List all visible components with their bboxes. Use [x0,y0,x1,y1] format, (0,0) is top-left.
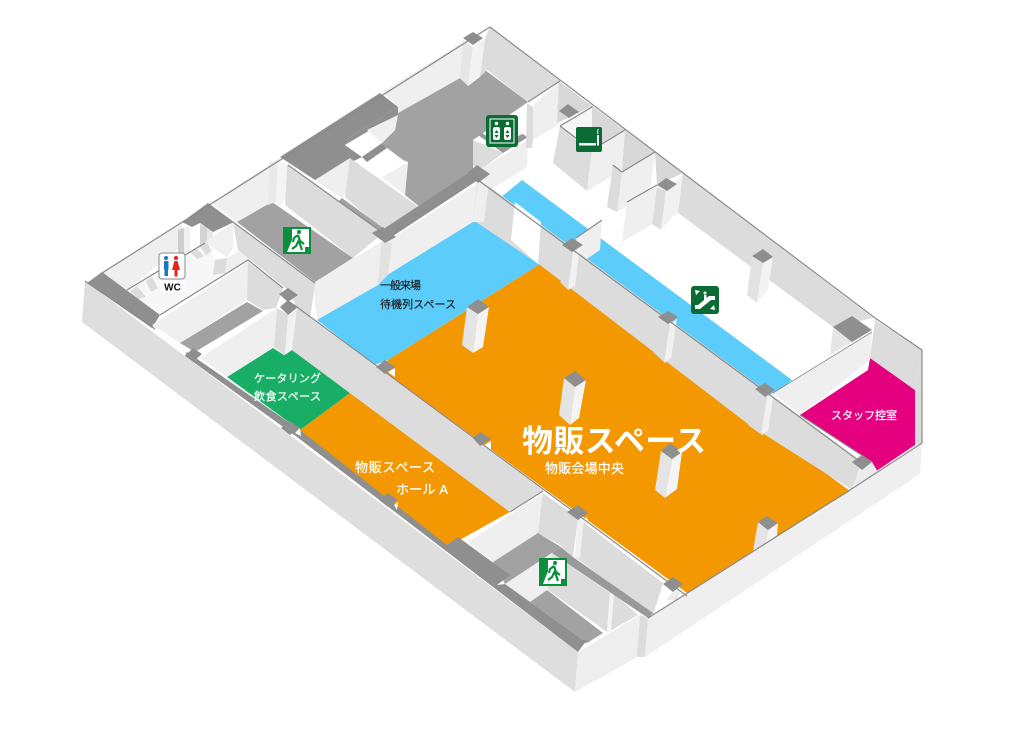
main wall pillar tops [372,32,872,470]
back area: lift hall and shafts [280,27,560,320]
floor: staff room [800,358,915,472]
smoking room block [553,81,683,242]
free standing pillar 4 [753,516,778,551]
label: main sales space: 物販スペース [522,424,706,459]
middle wall between hall A and main space [279,288,543,512]
floor: general queue area [317,220,540,365]
upper right corridor walls [576,173,922,445]
label: general queue area line 2: 待機列スペース [380,297,456,311]
front wall top band [185,348,587,652]
building footprint floor [85,27,922,652]
icon: smoking area [576,127,602,152]
outline strokes [85,27,922,618]
floor: catering area [227,348,350,430]
bottom stair room [468,493,683,643]
lift lobby box [473,82,560,190]
label: food and drink space: 飲食スペース [254,389,321,403]
left wing: washrooms and service rooms [87,158,353,377]
icon: emergency exit, north room [283,227,311,254]
label: catering: ケータリング [254,371,321,385]
label: sales space hall A: 物販スペース [355,460,435,475]
main wall between sales space and corridor [473,174,878,490]
floor: sales hall A [300,393,510,547]
icon: emergency exit, south room [539,558,567,586]
free standing pillar: upper corridor [747,249,773,303]
label: staff room: スタッフ控室 [831,409,897,422]
free standing pillar 1 [462,299,489,353]
floor: main sales space [381,264,850,593]
building exterior walls [82,281,922,692]
label: general queue area: 一般来場 [380,279,421,292]
free standing pillar 3 [655,443,682,498]
floor: blue corridor [500,180,792,398]
icon: restrooms [159,253,185,294]
label: sales hall centre: 物販会場中央 [545,461,624,476]
label: hall A: ホール A [396,482,448,497]
free standing pillar 2 [559,371,586,425]
icon: restrooms: WC [164,282,181,294]
icon: escalator [691,286,719,314]
icon: elevator [486,115,518,147]
